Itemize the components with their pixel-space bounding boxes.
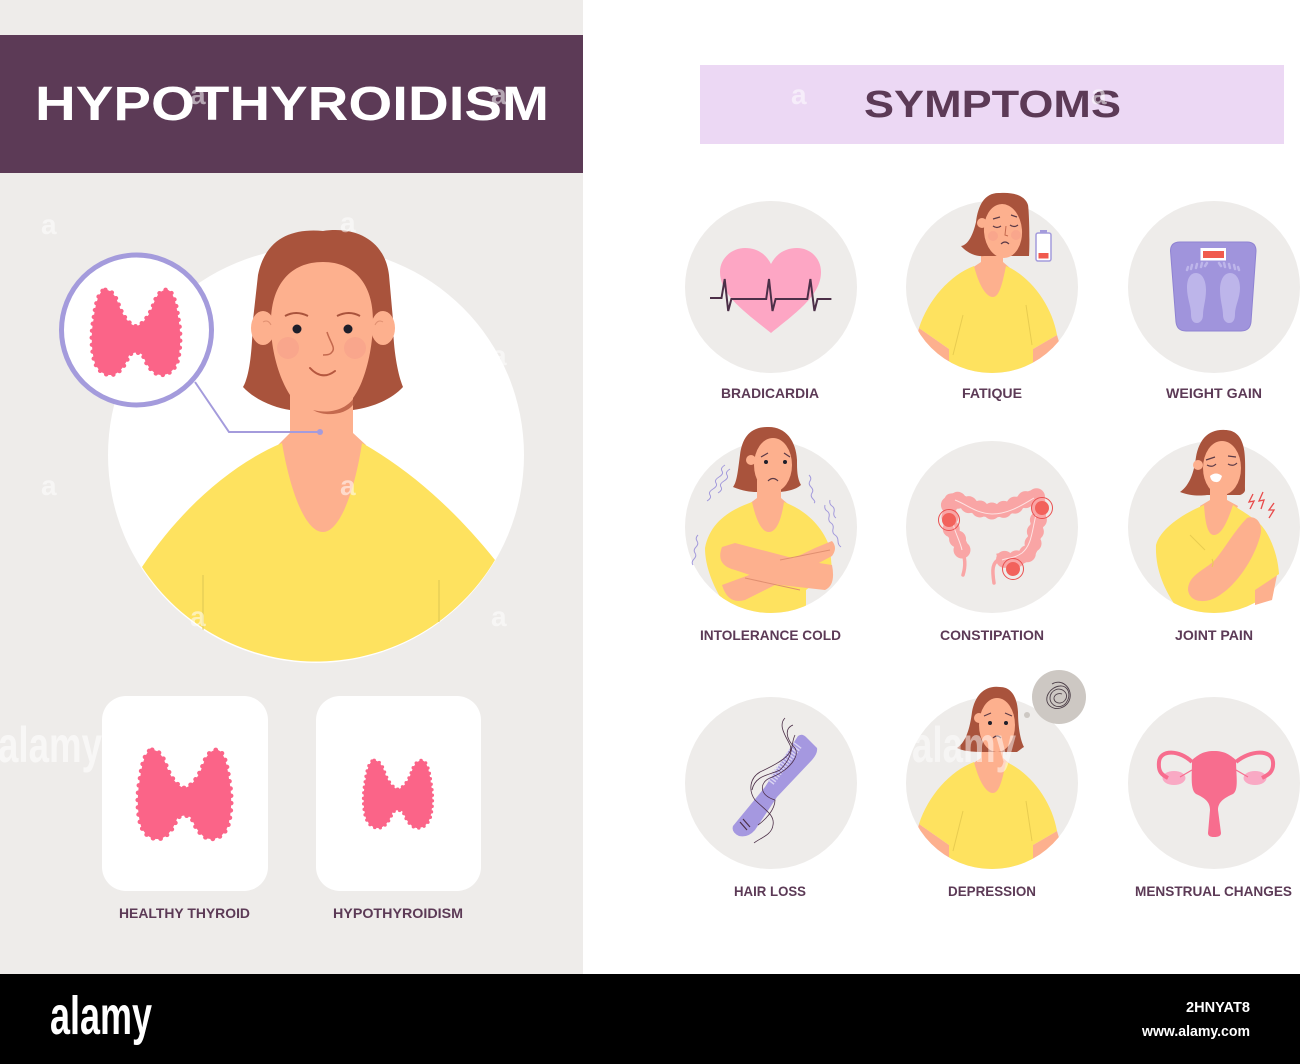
footer bar: 2HNYAT8 — [1186, 999, 1250, 1016]
stock watermark marks: a — [1091, 79, 1107, 110]
stock watermark marks: a — [491, 79, 507, 110]
stock watermark marks: a — [791, 79, 807, 110]
card: healthy thyroid — [102, 696, 268, 891]
callout line — [195, 382, 320, 432]
stock watermark marks — [0, 79, 1107, 773]
woman head — [961, 193, 1029, 259]
woman holding shoulder — [1156, 430, 1279, 620]
icon: uterus — [1159, 751, 1273, 837]
icon: scale — [1170, 242, 1256, 331]
white backdrop circle — [108, 247, 524, 663]
footer bar — [0, 974, 1300, 1064]
woman figure — [142, 230, 495, 662]
symptom: fatigue — [905, 193, 1078, 401]
title banner — [0, 35, 583, 173]
symptoms heading — [700, 65, 1284, 144]
icon: thought bubble — [1024, 670, 1086, 724]
icon: shiver lines — [692, 465, 841, 565]
symptom: intolerance cold — [685, 427, 857, 643]
label: BRADICARDIA — [721, 385, 819, 401]
label: CONSTIPATION — [940, 627, 1044, 643]
stock watermark marks: alamy — [912, 717, 1016, 773]
stock watermark marks: a — [340, 470, 356, 501]
symptom: depression — [905, 670, 1086, 899]
stock watermark marks: alamy — [0, 717, 102, 773]
stock watermark marks: a — [41, 470, 57, 501]
icon: pain spots — [938, 498, 1052, 580]
label: HAIR LOSS — [734, 883, 806, 899]
left panel background — [0, 0, 583, 974]
label: hypothyroidism: HYPOTHYROIDISM — [333, 905, 463, 921]
stock watermark marks: a — [41, 209, 57, 240]
label: healthy thyroid: HEALTHY THYROID — [119, 905, 250, 921]
main illustration: woman with thyroid callout — [62, 230, 524, 663]
label: JOINT PAIN — [1175, 627, 1253, 643]
icon: heart — [720, 248, 821, 333]
icon: colon — [949, 496, 1040, 583]
stock watermark marks: a — [190, 79, 206, 110]
footer bar: alamy — [50, 986, 152, 1046]
symptom: hair loss — [685, 697, 857, 899]
symptom: joint pain — [1128, 430, 1300, 643]
icon: loose hair strands — [751, 718, 796, 843]
title banner: HYPOTHYROIDISM — [35, 78, 549, 131]
label: MENSTRUAL CHANGES — [1135, 883, 1292, 899]
label: INTOLERANCE COLD — [700, 627, 841, 643]
symptom: weight gain — [1128, 201, 1300, 401]
woman body — [905, 741, 1070, 876]
yellow shirt — [142, 443, 495, 662]
stock watermark marks: a — [491, 340, 507, 371]
stock watermark marks: a — [491, 601, 507, 632]
woman body — [905, 245, 1070, 380]
symptom: constipation — [906, 441, 1078, 643]
symptom: bradicardia — [685, 201, 857, 401]
woman head — [957, 687, 1024, 752]
icon: ecg line — [710, 279, 831, 311]
label: DEPRESSION — [948, 883, 1036, 899]
stock watermark marks: a — [340, 207, 356, 238]
label: WEIGHT GAIN — [1166, 385, 1262, 401]
label: FATIQUE — [962, 385, 1022, 401]
stock watermark marks: a — [190, 601, 206, 632]
card: hypothyroidism — [316, 696, 481, 891]
footer bar: www.alamy.com — [1141, 1023, 1250, 1040]
callout magnifier with thyroid — [62, 255, 212, 405]
icon: low battery — [1036, 230, 1051, 261]
symptoms heading: SYMPTOMS — [864, 84, 1121, 126]
icon: comb — [733, 735, 817, 836]
symptom: menstrual changes — [1128, 697, 1300, 899]
woman with crossed arms — [705, 427, 835, 620]
icon: lightning pain marks — [1249, 492, 1274, 518]
